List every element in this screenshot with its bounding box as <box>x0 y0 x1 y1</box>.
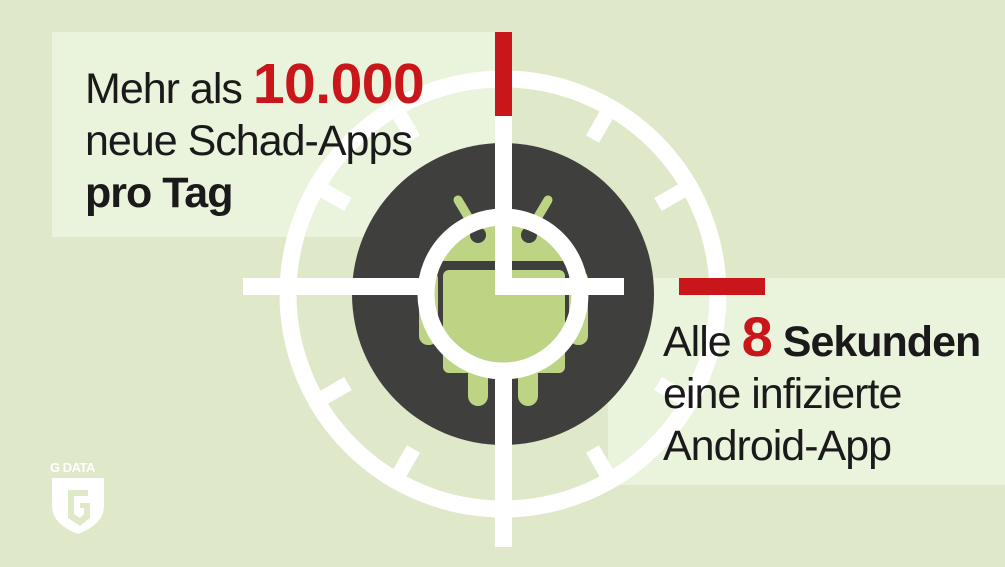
panel: right <box>608 278 1005 485</box>
crosshair lines <box>243 116 624 547</box>
text block: left <box>85 52 424 217</box>
panel: left <box>52 32 495 237</box>
dark circle <box>352 143 654 445</box>
text block: left: neue Schad-Apps <box>85 117 412 165</box>
outer ring with ticks <box>288 79 718 509</box>
red markers <box>495 32 512 116</box>
text block: left: pro Tag <box>85 169 232 217</box>
logo: G DATA: G DATA <box>50 460 95 475</box>
text block: right <box>663 305 980 470</box>
logo: G DATA <box>50 460 104 534</box>
text block: right: Android-App <box>663 422 891 470</box>
icon: android <box>419 200 588 406</box>
text block: left: Mehr als 10.000 <box>85 52 424 116</box>
text block: right: eine infizierte <box>663 370 901 418</box>
text block: right: Alle 8 Sekunden <box>663 305 980 368</box>
